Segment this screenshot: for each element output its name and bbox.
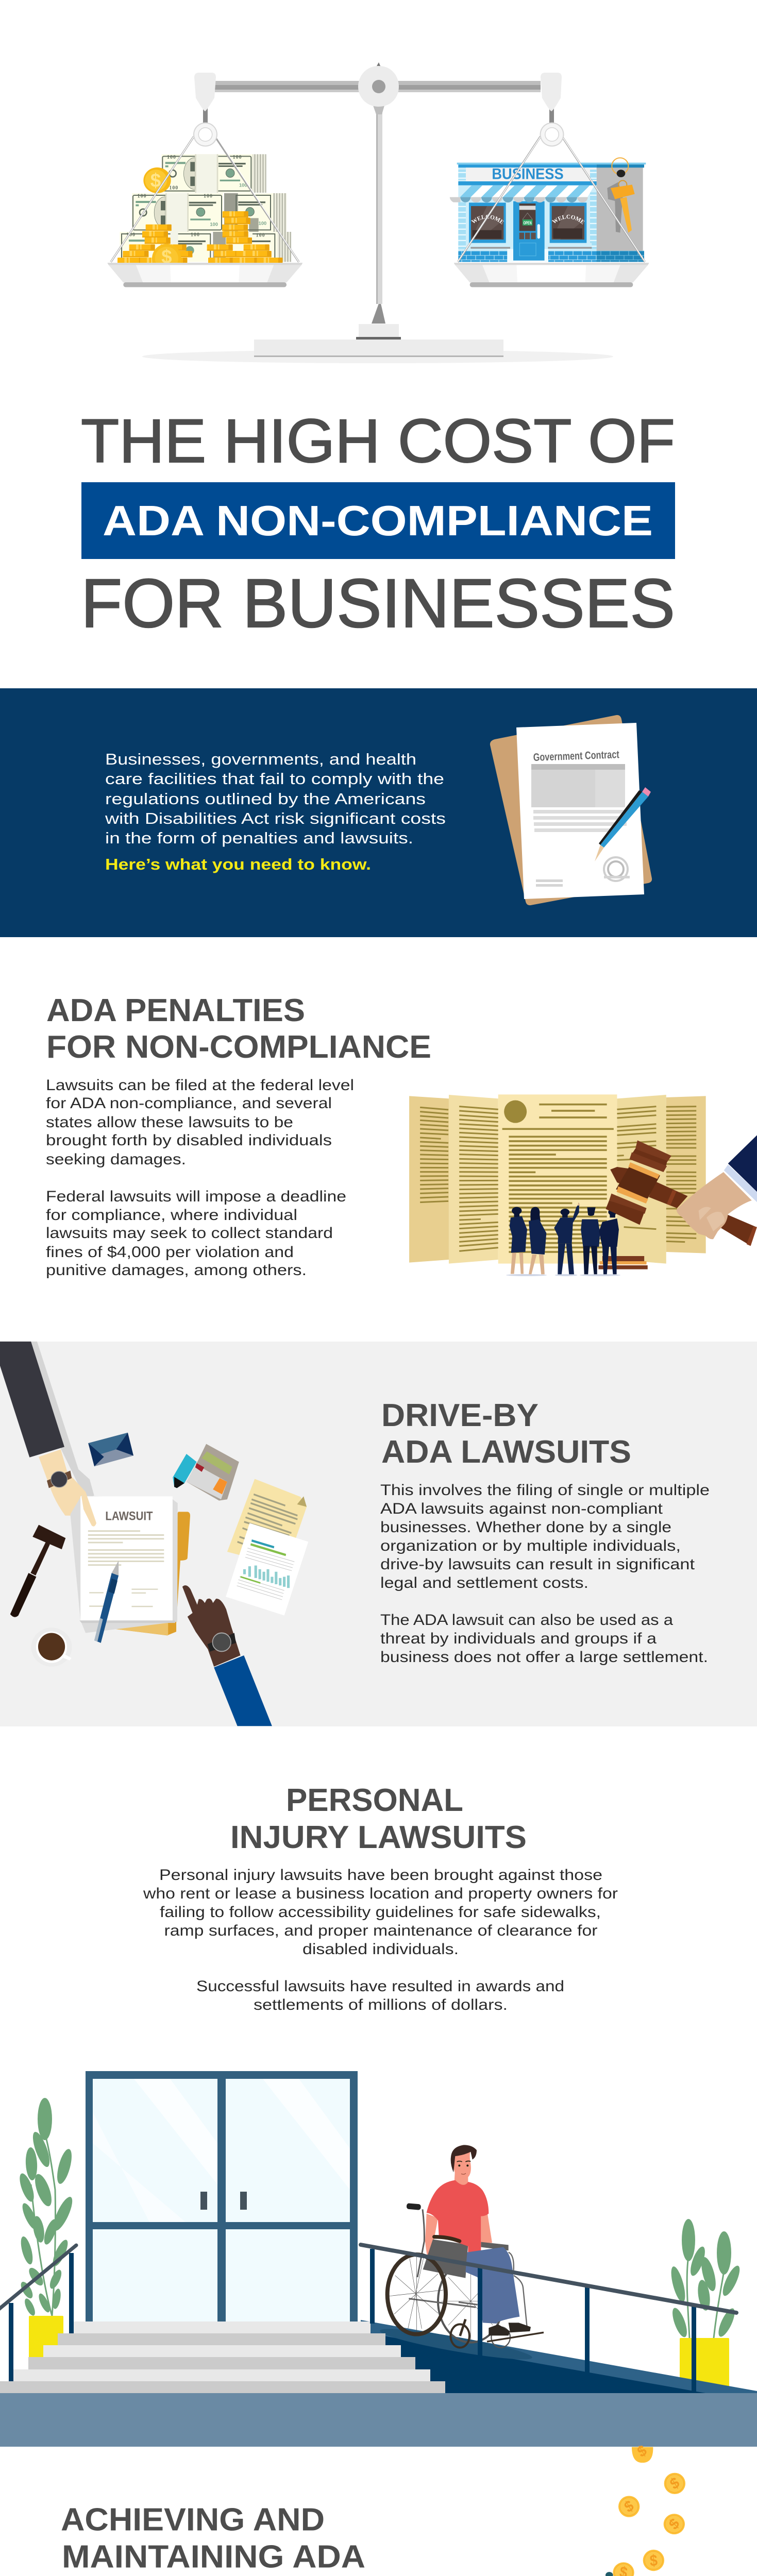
intro call to action: Here’s what you need to know. <box>105 855 371 873</box>
gold coin stacks <box>117 167 282 273</box>
seated man <box>423 2145 544 2342</box>
right pan <box>454 263 649 287</box>
lawsuit papers <box>70 1496 178 1633</box>
text block: drive-by: drive-by lawsuits can result in significant <box>380 1556 695 1573</box>
document panels <box>409 1094 706 1264</box>
heading: ADA penalties: ADA PENALTIES <box>46 993 305 1028</box>
scale rings and rods <box>193 108 564 146</box>
people figures <box>506 1202 620 1276</box>
money pile on left pan: 100 <box>126 232 136 238</box>
stacked books <box>598 1256 648 1269</box>
text block: drive-by: This involves the filing of single or multiple <box>380 1482 710 1499</box>
text block: penalties: Federal lawsuits will impose a deadline <box>46 1188 346 1205</box>
folder <box>116 1512 190 1635</box>
section: personal injury lawsuits <box>143 1783 618 2013</box>
money pile on left pan: 100 <box>259 221 266 226</box>
base shadow <box>142 350 613 363</box>
illustration: legal document, gavel and people <box>409 1094 757 1276</box>
intro text <box>105 750 446 847</box>
rear wheel and frame <box>409 2209 527 2348</box>
illustration: coins and savings jar <box>515 2442 697 2576</box>
heading: compliance <box>61 2502 525 2576</box>
left plant <box>17 2098 76 2358</box>
shop windows: WELCOME <box>551 214 585 225</box>
light hand finger overlay <box>81 1492 96 1527</box>
text block: penalties <box>46 1077 354 1279</box>
calculator and highlighter <box>173 1444 239 1501</box>
icon: contract and envelope: Government Contract <box>533 749 619 764</box>
intro background <box>0 688 757 937</box>
text block: personal injury: Personal injury lawsuits have been brought against those <box>159 1867 602 1884</box>
envelope <box>88 1433 133 1466</box>
shop windows <box>469 202 592 249</box>
text block: penalties: for ADA non-compliance, and several <box>46 1095 332 1112</box>
text block: personal injury: Successful lawsuits have resulted in awards and <box>196 1978 564 1995</box>
falling coins: $ <box>666 2515 683 2533</box>
money pile on left pan <box>107 137 302 287</box>
wheelchair handle <box>407 2203 421 2210</box>
drive-by background <box>0 1342 757 1726</box>
heading: drive-by: ADA LAWSUITS <box>381 1434 631 1470</box>
lawsuit papers: LAWSUIT <box>105 1509 153 1523</box>
right plant <box>668 2219 743 2389</box>
scale base and stem <box>254 112 503 357</box>
scale beam <box>194 62 562 114</box>
text block: personal injury: failing to follow accessibility guidelines for safe sidewalks, <box>160 1904 601 1921</box>
title <box>81 406 675 642</box>
icon: contract and envelope <box>490 715 652 905</box>
falling coins: $ <box>621 2497 636 2516</box>
falling coins: $ <box>649 2552 658 2570</box>
money pile on left pan: 100 <box>169 185 178 191</box>
gold coin stacks: $ <box>161 246 172 267</box>
panel: drive-by lawsuits <box>0 1342 757 1726</box>
floor band <box>0 2393 757 2447</box>
person in wheelchair <box>388 2145 544 2348</box>
heading: ADA penalties: FOR NON-COMPLIANCE <box>46 1029 431 1065</box>
falling coins <box>613 2442 685 2576</box>
text block: penalties: seeking damages. <box>46 1151 186 1168</box>
text block: drive-by: organization or by multiple individuals, <box>380 1537 681 1554</box>
title banner <box>81 482 675 559</box>
text block: drive-by: legal and settlement costs. <box>380 1574 588 1591</box>
money pile on left pan: 100 <box>256 232 265 238</box>
money pile on left pan: 100 <box>239 183 247 188</box>
heading: personal injury: INJURY LAWSUITS <box>230 1820 527 1855</box>
shop door <box>513 201 545 261</box>
heading: personal injury: PERSONAL <box>286 1783 463 1818</box>
text block: penalties: punitive damages, among others. <box>46 1262 307 1279</box>
text block: penalties: for compliance, where individual <box>46 1207 297 1224</box>
intro text: with Disabilities Act risk significant costs <box>105 809 446 827</box>
white report with bar chart <box>226 1523 308 1616</box>
text block: personal injury: disabled individuals. <box>302 1941 459 1958</box>
text block: personal injury: settlements of millions of dollars. <box>254 1996 508 2013</box>
money pile on left pan: 100 <box>204 194 213 199</box>
intro text: care facilities that fail to comply with the <box>105 770 444 788</box>
text block: drive-by: business does not offer a large settlement. <box>380 1649 708 1666</box>
glass double doors <box>86 2071 358 2321</box>
section: compliance saves money <box>61 2442 697 2576</box>
money pile on left pan: 100 <box>138 194 147 199</box>
panel: intro <box>0 688 757 937</box>
money pile on left pan: 100 <box>167 155 176 160</box>
staircase <box>0 2321 445 2393</box>
pen <box>94 1561 119 1643</box>
front wheel and caster <box>388 2255 469 2348</box>
gold key <box>607 158 635 233</box>
text block: penalties: Lawsuits can be filed at the federal level <box>46 1077 354 1094</box>
dark hand and watch <box>182 1585 272 1726</box>
falling coins: $ <box>634 2442 650 2461</box>
tall man placing coin <box>593 2572 631 2576</box>
shop windows: WELCOME <box>471 214 504 225</box>
storefront on right pan <box>449 136 649 287</box>
money pile on left pan: 100 <box>210 222 218 227</box>
heading: personal injury <box>230 1783 527 1855</box>
heading: ADA penalties <box>46 993 431 1065</box>
falling coins: $ <box>667 2474 682 2494</box>
gold coin stacks: $ <box>150 170 161 191</box>
shop sign: BUSINESS <box>492 165 564 182</box>
illustration: lawsuit desk <box>0 1342 308 1726</box>
heading: drive-by <box>381 1398 631 1470</box>
coffee cup <box>31 1628 72 1667</box>
string highlights <box>111 137 645 262</box>
heading: drive-by: DRIVE-BY <box>381 1398 539 1433</box>
right pan strings <box>458 137 645 262</box>
section: ADA penalties <box>46 993 757 1279</box>
text block: penalties: lawsuits may seek to collect standard <box>46 1225 333 1242</box>
text block: penalties: fines of $4,000 per violation and <box>46 1244 294 1261</box>
money pile on left pan: 100 <box>233 155 242 160</box>
handrails <box>0 2245 736 2393</box>
left pan <box>107 263 302 287</box>
gavel head and hand <box>605 1135 757 1246</box>
text block: drive-by: ADA lawsuits against non-compliant <box>380 1500 663 1517</box>
left pan strings <box>111 137 299 262</box>
text block: penalties: states allow these lawsuits to be <box>46 1114 293 1131</box>
illustration: accessible entrance <box>0 2071 757 2447</box>
title line 1: THE HIGH COST OF <box>81 406 675 476</box>
text block: personal injury: ramp surfaces, and proper maintenance of clearance for <box>164 1922 598 1939</box>
ramp <box>361 2320 757 2393</box>
striped awning <box>450 185 594 202</box>
shop brick base <box>458 249 644 262</box>
sleeve and light hand <box>0 1342 96 1527</box>
heading: compliance: MAINTAINING ADA <box>62 2539 365 2575</box>
text block: drive-by: businesses. Whether done by a single <box>380 1519 671 1536</box>
yellow document <box>227 1479 307 1564</box>
text block: penalties: brought forth by disabled individuals <box>46 1132 332 1149</box>
heading: compliance: ACHIEVING AND <box>61 2502 325 2538</box>
text block: personal injury: who rent or lease a business location and property owners for <box>143 1885 618 1902</box>
intro text: Businesses, governments, and health <box>105 750 416 768</box>
small gavel <box>10 1525 65 1617</box>
text block: drive-by: The ADA lawsuit can also be used as a <box>380 1612 673 1629</box>
shop door: OPEN <box>524 220 532 225</box>
hero illustration: balance scale <box>107 62 649 363</box>
intro text: regulations outlined by the Americans <box>105 790 426 808</box>
text block: personal injury <box>143 1867 618 2013</box>
text block: drive-by: threat by individuals and groups if a <box>380 1630 657 1647</box>
money pile on left pan: 100 <box>191 232 200 238</box>
intro text: in the form of penalties and lawsuits. <box>105 829 413 847</box>
text block: drive-by <box>380 1482 710 1666</box>
title line 2: ADA NON-COMPLIANCE <box>103 497 653 545</box>
title line 3: FOR BUSINESSES <box>81 565 675 642</box>
